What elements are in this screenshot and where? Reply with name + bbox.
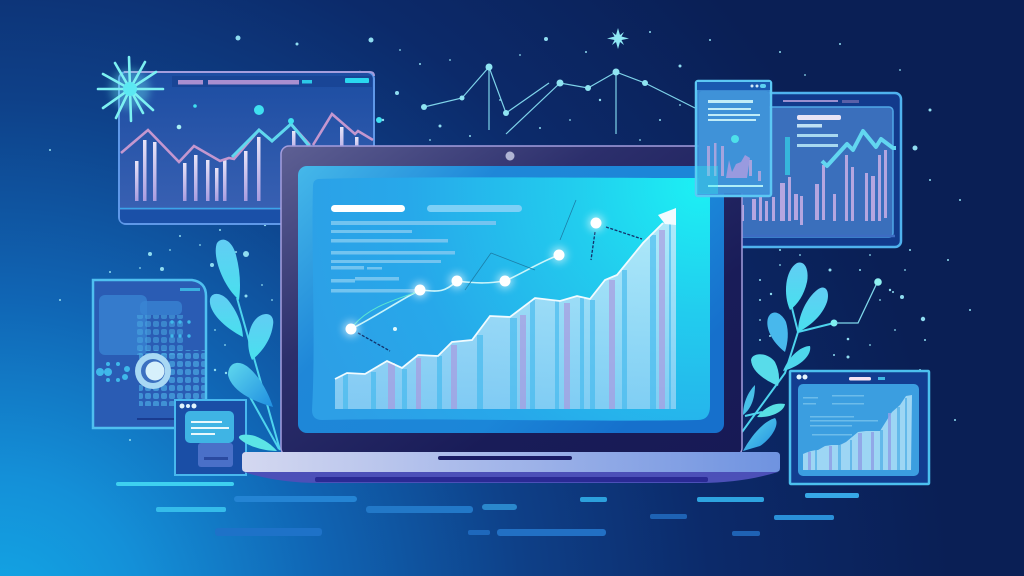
trackpad notch [438, 456, 572, 460]
panel: top-left chart window [119, 72, 382, 224]
panel: top-right chart window [725, 93, 901, 247]
line chart connector [830, 278, 882, 326]
laptop lid [281, 146, 742, 456]
glowing data points [343, 215, 604, 337]
line chart [822, 131, 896, 166]
text lines [797, 115, 841, 147]
constellation line chart [421, 64, 695, 134]
webcam [506, 152, 514, 160]
bars [740, 150, 887, 225]
legend streaks [116, 482, 859, 536]
area bar chart [335, 208, 676, 409]
panel: floating mini chart window [696, 81, 771, 196]
dial icon [135, 353, 171, 389]
line chart [121, 124, 310, 162]
icon: sparkle star [607, 28, 629, 49]
header bars [178, 78, 369, 84]
plant: right [742, 263, 834, 451]
panel: small card window [175, 400, 246, 475]
text lines [803, 395, 878, 436]
icon: firework burst [98, 57, 163, 121]
panel: bottom-left data window [93, 280, 206, 428]
laptop [242, 146, 780, 483]
star field [49, 31, 971, 441]
plant: left [210, 240, 280, 451]
panel: bottom-right chart window [790, 371, 929, 484]
text lines [191, 421, 229, 435]
header and text lines [331, 205, 522, 292]
bars [135, 127, 358, 201]
base underside [244, 472, 778, 483]
mini bars [707, 143, 761, 181]
screen [298, 166, 724, 433]
text lines [708, 100, 760, 121]
trend line and dashed links [351, 200, 642, 351]
inner panel [312, 177, 710, 421]
dot grid [96, 320, 191, 382]
area chart [803, 395, 912, 470]
arrowhead [658, 208, 676, 225]
laptop base [242, 452, 780, 472]
dots [193, 104, 382, 124]
